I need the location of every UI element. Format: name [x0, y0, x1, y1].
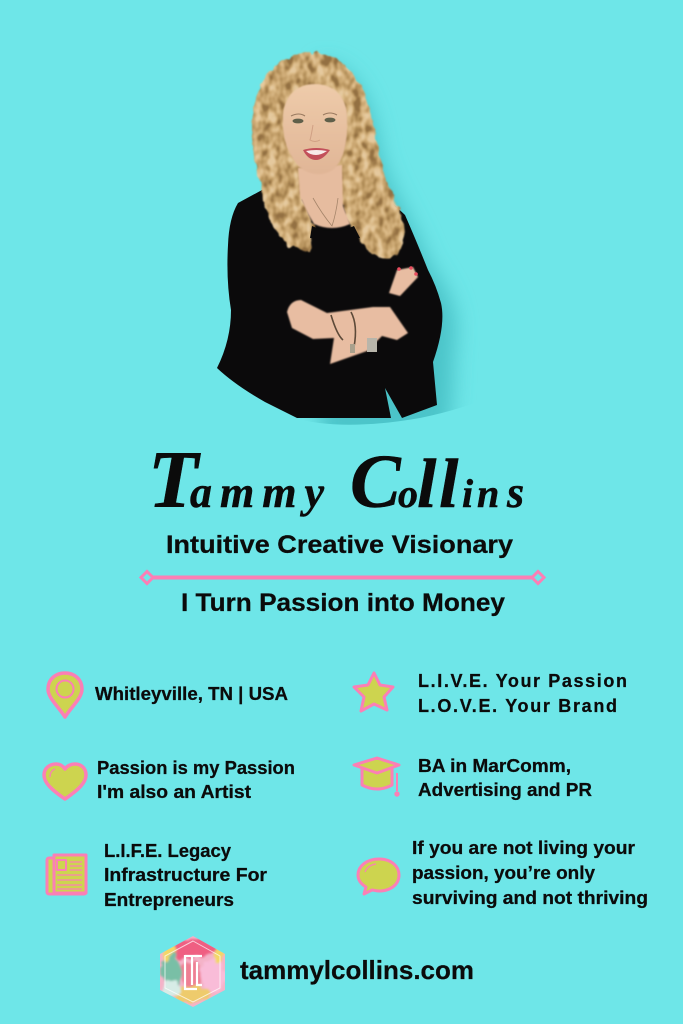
quote text: [412, 838, 648, 908]
eyebrows: [291, 113, 337, 116]
face: [283, 84, 347, 174]
portrait photo: [217, 53, 457, 440]
location text: Whitleyville, TN | USA: [95, 684, 288, 704]
photo shadow: [320, 62, 457, 440]
degree text: [418, 756, 592, 800]
passion text: I'm also an Artist: [97, 782, 251, 802]
mouth: [303, 148, 330, 160]
name title: ammy: [190, 468, 332, 517]
website: tammylcollins.com: [240, 955, 474, 985]
bracelets: [331, 312, 355, 347]
live love text: [418, 671, 627, 716]
nails: [397, 266, 418, 276]
logo: watercolor hexagon: [160, 936, 225, 1007]
live love text: L.I.V.E. Your Passion: [418, 671, 627, 691]
name title: T: [148, 434, 201, 525]
name title: C: [350, 440, 402, 524]
name title: l: [439, 446, 459, 523]
icon: graduation cap: [354, 758, 399, 796]
blouse neckline: [310, 226, 360, 238]
LIFE text: [104, 841, 267, 910]
neck and chest: [298, 165, 350, 228]
tagline: I Turn Passion into Money: [181, 589, 505, 617]
icon: newspaper: [47, 855, 86, 894]
icon: speech bubble: [358, 859, 399, 894]
live love text: L.O.V.E. Your Brand: [418, 696, 617, 716]
crossed arms: [287, 300, 408, 364]
name title: s: [506, 468, 524, 517]
quote text: surviving and not thriving: [412, 888, 648, 908]
degree text: BA in MarComm,: [418, 756, 571, 776]
name title: l: [417, 446, 437, 523]
hand: [389, 267, 418, 296]
LIFE text: L.I.F.E. Legacy: [104, 841, 231, 861]
icon: heart: [44, 764, 86, 799]
icon: location pin: [48, 673, 82, 717]
quote text: passion, you’re only: [412, 863, 595, 883]
silver bracelet: [367, 338, 377, 352]
LIFE text: Infrastructure For: [104, 865, 267, 885]
name title: n: [477, 471, 499, 516]
passion text: [97, 758, 295, 802]
hair: [251, 53, 405, 258]
degree text: Advertising and PR: [418, 780, 592, 800]
name title: i: [462, 471, 473, 516]
name title: o: [398, 471, 418, 516]
divider with diamonds: [141, 572, 544, 584]
necklace: [313, 198, 338, 226]
subtitle: Intuitive Creative Visionary: [166, 531, 513, 559]
black blouse: [217, 180, 442, 418]
eyes: [292, 118, 336, 123]
LIFE text: Entrepreneurs: [104, 890, 234, 910]
icon: star: [354, 673, 393, 711]
nose: [310, 125, 320, 142]
passion text: Passion is my Passion: [97, 758, 295, 778]
pendant: [350, 344, 355, 353]
quote text: If you are not living your: [412, 838, 635, 858]
